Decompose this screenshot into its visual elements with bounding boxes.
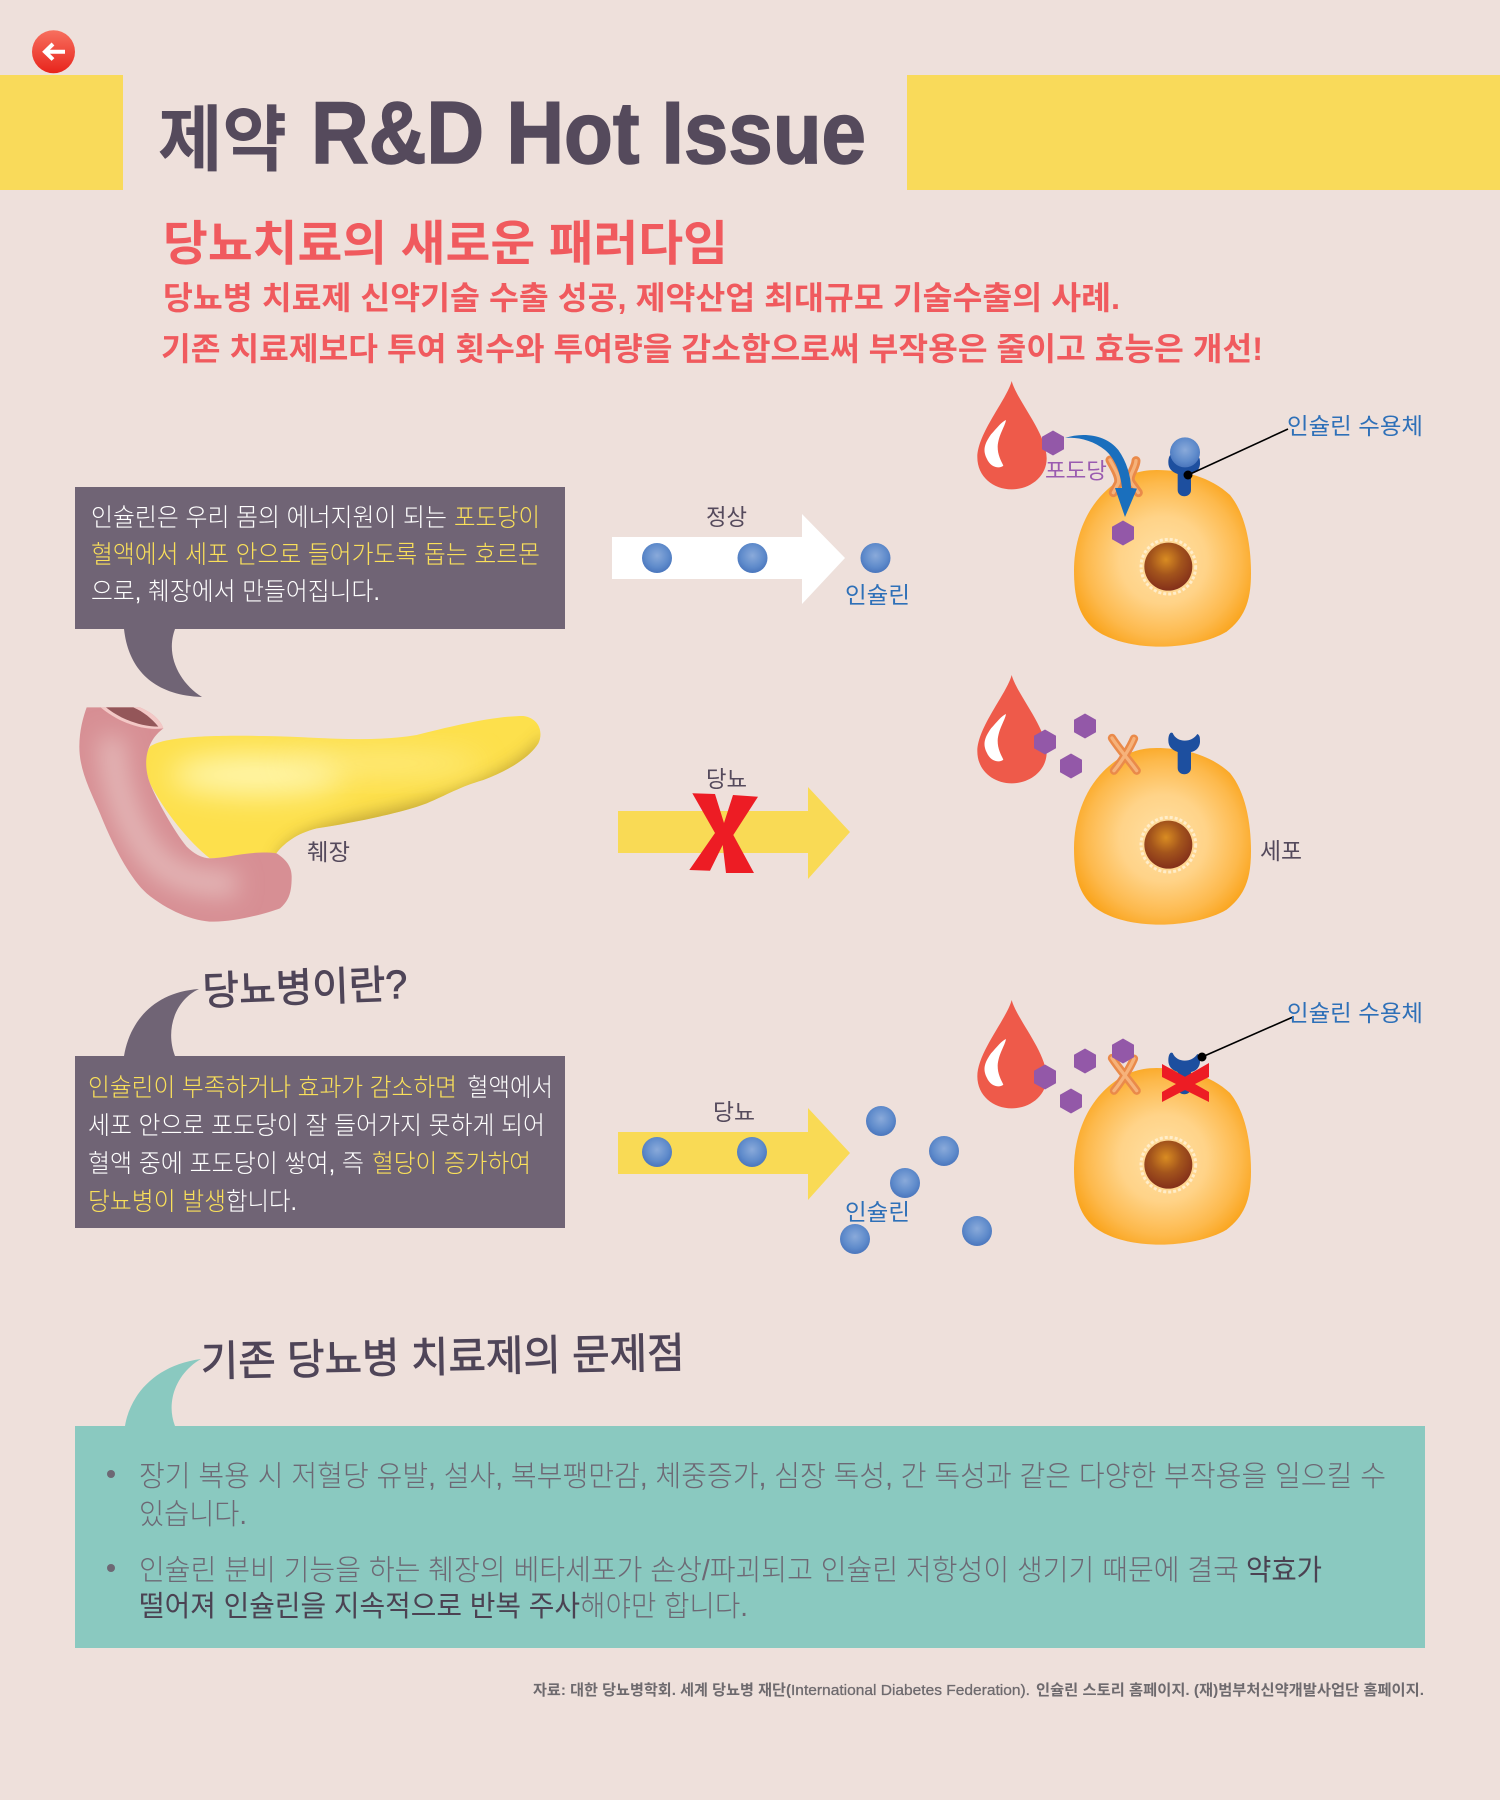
- subtitle: 당뇨치료의 새로운 패러다임: [163, 218, 728, 271]
- callout: insulin receptor top: [1184, 413, 1423, 480]
- label: cell: 세포: [1260, 838, 1302, 864]
- label: diabetes row two: 당뇨: [706, 766, 747, 792]
- panel: diabetes explanation callout: 인슐린이 부족하거나 효과가 감소하면: [88, 1074, 457, 1102]
- panel: diabetes explanation callout: 합니다.: [226, 1188, 297, 1216]
- label: pancreas: 췌장: [307, 839, 350, 865]
- label: insulin: 인슐린: [845, 582, 910, 608]
- panel: problems of existing treatments: [75, 1359, 1425, 1648]
- panel: insulin explanation callout: 포도당이: [454, 504, 540, 532]
- bullet one: 장기 복용 시 저혈당 유발, 설사, 복부팽만감, 체중증가, 심장 독성, 간 독성과 같은 다양한 부작용을 일으킬 수: [139, 1460, 1386, 1493]
- panel: diabetes explanation callout: 혈액 중에 포도당이 쌓여, 즉: [88, 1150, 364, 1178]
- bullet two: 인슐린 분비 기능을 하는 췌장의 베타세포가 손상/파괴되고 인슐린 저항성이 생기기 때문에 결국: [139, 1555, 1239, 1587]
- icon: red X: [689, 793, 758, 873]
- bullet two: 약효가: [1246, 1554, 1322, 1587]
- source footnote: 자료: 대한 당뇨병학회. 세계 당뇨병 재단(: [533, 1682, 791, 1699]
- panel: diabetes explanation callout: [75, 989, 565, 1228]
- callout: insulin receptor bottom: [1198, 1000, 1423, 1062]
- panel: diabetes explanation callout: 세포 안으로 포도당이 잘 들어가지 못하게 되어: [88, 1112, 545, 1140]
- title: 제약: [158, 101, 287, 181]
- icon: back button: [32, 30, 75, 73]
- source footnote: International Diabetes Federation).: [791, 1682, 1030, 1699]
- icon: insulin ball: [860, 543, 890, 573]
- bullet one: [107, 1460, 1386, 1531]
- arrow: reduced insulin flow: [618, 1108, 850, 1200]
- callout: insulin receptor bottom: 인슐린 수용체: [1287, 1000, 1423, 1026]
- title: R&D Hot Issue: [311, 83, 866, 182]
- label: normal: 정상: [706, 504, 747, 530]
- label: insulin row three: 인슐린: [845, 1199, 910, 1225]
- heading: what is diabetes: 당뇨병이란?: [202, 963, 408, 1014]
- header band left: [0, 75, 123, 190]
- bullet one: 있습니다.: [139, 1499, 247, 1531]
- arrow: normal insulin flow: [612, 514, 845, 604]
- bullet two: [107, 1554, 1322, 1623]
- panel: insulin explanation callout: 인슐린은 우리 몸의 에너지원이 되는: [91, 504, 447, 532]
- diagram: normal cell: [977, 381, 1251, 647]
- summary text block: 기존 치료제보다 투여 횟수와 투여량을 감소함으로써 부작용은 줄이고 효능은 개선!: [161, 331, 1263, 367]
- bullet two: 해야만 합니다.: [580, 1591, 748, 1623]
- callout: insulin receptor top: 인슐린 수용체: [1287, 413, 1423, 439]
- illustration: pancreas and duodenum: [79, 707, 547, 922]
- panel: insulin explanation callout: [75, 487, 565, 697]
- summary text block: 당뇨병 치료제 신약기술 수출 성공, 제약산업 최대규모 기술수출의 사례.: [163, 280, 1120, 316]
- summary text block: [161, 280, 1263, 367]
- heading: problems of existing treatments: 기존 당뇨병 치료제의 문제점: [200, 1330, 685, 1385]
- source footnote: [533, 1682, 1424, 1699]
- diagram: cell without insulin: [977, 675, 1251, 925]
- scattered insulin balls: [840, 1106, 992, 1254]
- panel: diabetes explanation callout: 혈당이 증가하여: [372, 1150, 531, 1178]
- panel: insulin explanation callout: 혈액에서 세포 안으로 들어가도록 돕는 호르몬: [91, 541, 540, 569]
- source footnote: 인슐린 스토리 홈페이지. (재)범부처신약개발사업단 홈페이지.: [1036, 1682, 1424, 1699]
- panel: insulin explanation callout: 으로, 췌장에서 만들어집니다.: [91, 578, 380, 606]
- panel: diabetes explanation callout: 당뇨병이 발생: [88, 1188, 226, 1216]
- diagram: cell with blocked receptor: [977, 1000, 1251, 1245]
- panel: diabetes explanation callout: 혈액에서: [467, 1074, 553, 1102]
- arrow: no insulin flow: [618, 787, 850, 879]
- label: diabetes row three: 당뇨: [713, 1099, 755, 1125]
- header band right: [907, 75, 1500, 190]
- bullet two: 떨어져 인슐린을 지속적으로 반복 주사: [139, 1591, 580, 1623]
- diagram: normal cell: 포도당: [1045, 459, 1107, 484]
